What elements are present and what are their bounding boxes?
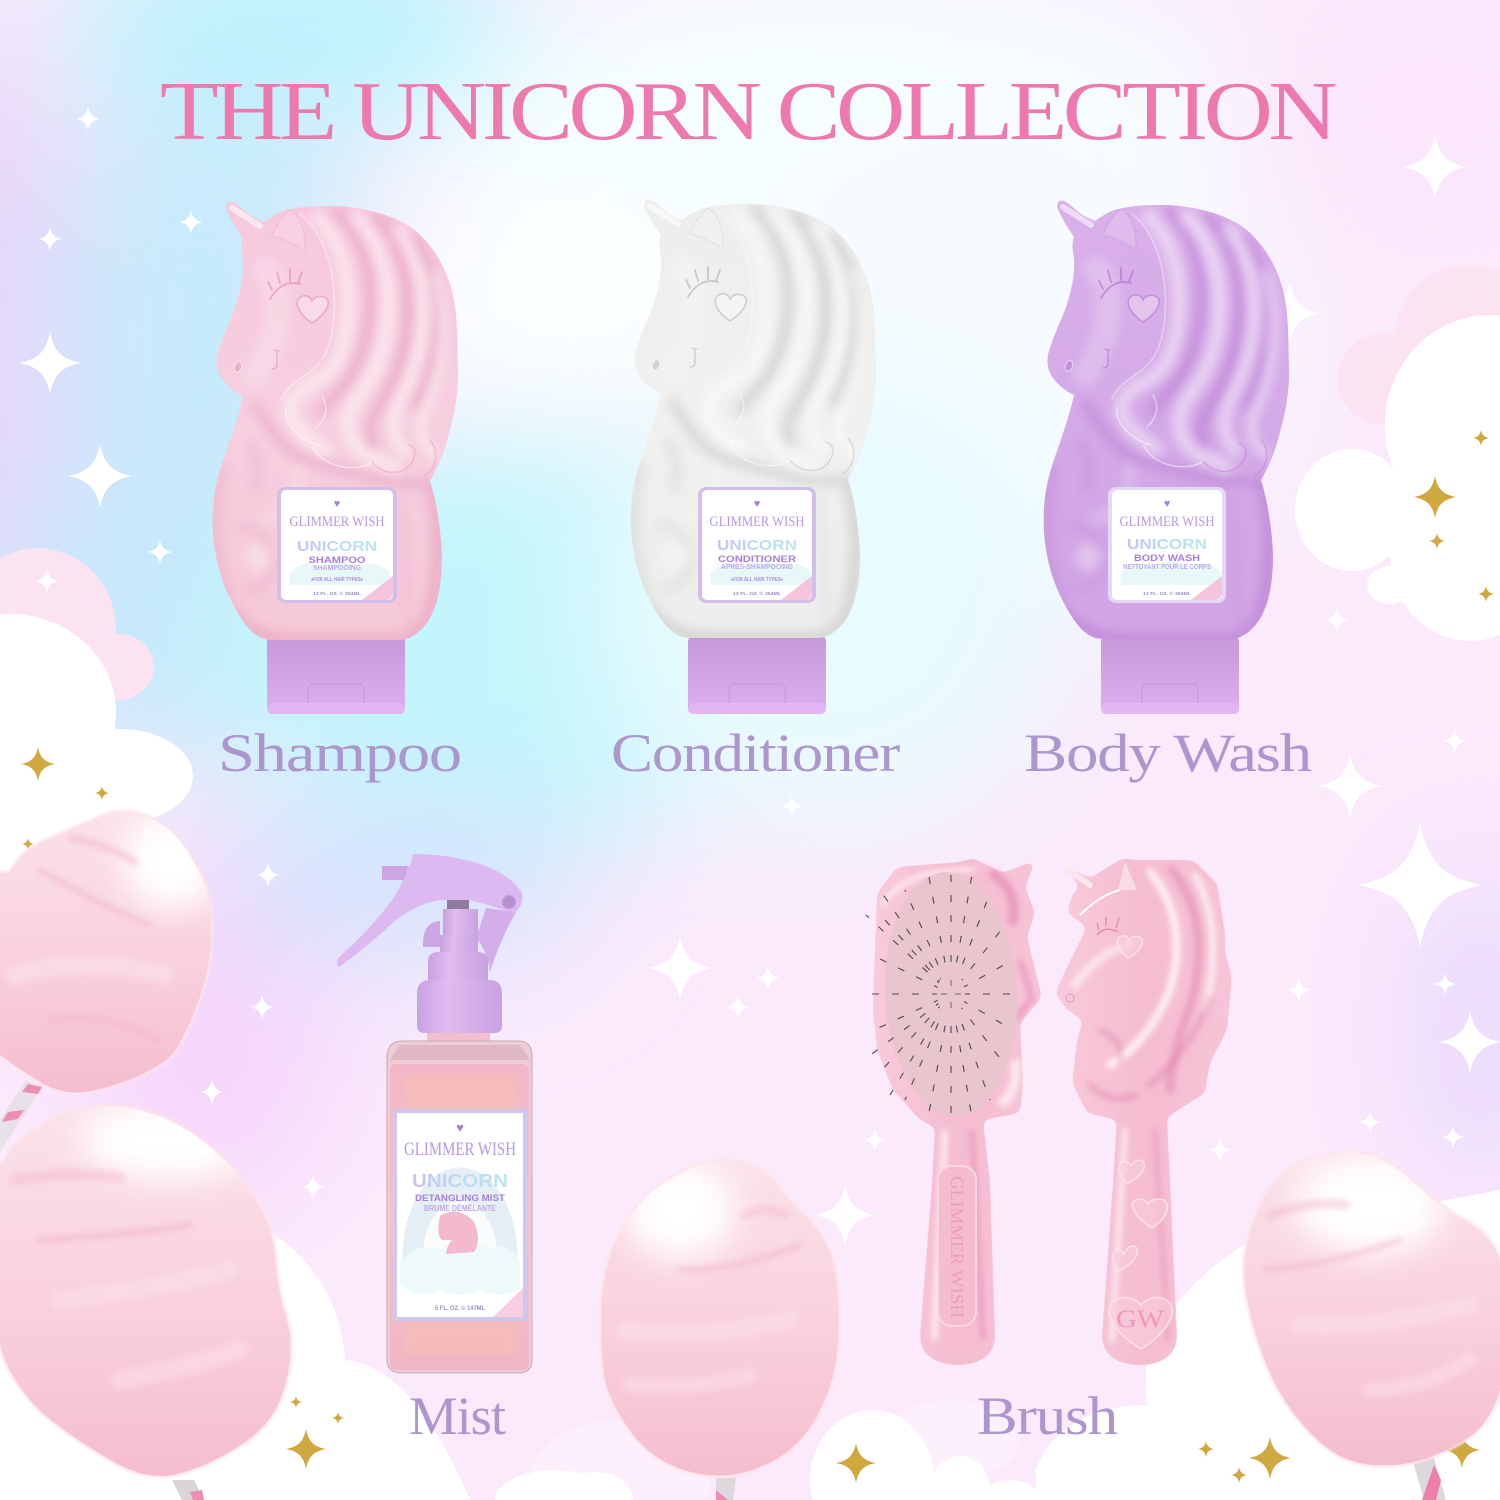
label: ♦FOR ALL HAIR TYPES♦ bbox=[731, 577, 783, 583]
unicorn body bbox=[631, 200, 876, 638]
mist label: 5 FL. OZ. © 147ML bbox=[435, 1305, 485, 1312]
brush: unicorn side bbox=[1055, 858, 1232, 1365]
label: ♥ bbox=[1164, 498, 1170, 510]
bottle: conditioner bbox=[631, 200, 876, 714]
mist label: GLIMMER WISH bbox=[404, 1139, 516, 1160]
gold sparkles bbox=[21, 430, 1494, 1483]
mist label bbox=[393, 1109, 527, 1321]
unicorn body bbox=[1044, 201, 1289, 639]
label bbox=[1108, 487, 1226, 603]
label: CONDITIONER bbox=[718, 554, 796, 565]
pump collar bbox=[417, 909, 502, 1033]
cap bbox=[1101, 634, 1239, 714]
product name: brush: Brush bbox=[977, 1386, 1118, 1446]
label bbox=[698, 487, 816, 603]
label: 12 FL. OZ. © 354ML bbox=[733, 590, 781, 597]
label: ♥ bbox=[754, 498, 760, 510]
product name: shampoo: Shampoo bbox=[218, 723, 461, 783]
mist label: UNICORN bbox=[412, 1171, 508, 1191]
brush: bristle side bbox=[860, 858, 1042, 1365]
product name: mist: Mist bbox=[409, 1386, 506, 1446]
label: ♥ bbox=[334, 498, 340, 510]
bottle: body wash bbox=[1044, 201, 1289, 714]
label: GLIMMER WISH bbox=[710, 514, 805, 530]
label: UNICORN bbox=[297, 538, 377, 555]
bottle: shampoo bbox=[213, 202, 458, 714]
label: SHAMPOOING bbox=[313, 565, 362, 572]
label: NETTOYANT POUR LE CORPS bbox=[1123, 564, 1211, 571]
clouds left bbox=[0, 548, 193, 910]
cap bbox=[688, 634, 826, 714]
handle plate with logo bbox=[938, 1166, 976, 1326]
label bbox=[277, 487, 397, 603]
unicorn body bbox=[213, 202, 458, 640]
mist label: BRUME DÉMÊLANTE bbox=[424, 1204, 497, 1213]
label: 12 FL. OZ. © 354ML bbox=[1143, 590, 1191, 597]
label: ♦FOR ALL HAIR TYPES♦ bbox=[311, 577, 363, 583]
product name: body wash: Body Wash bbox=[1024, 723, 1312, 783]
label: UNICORN bbox=[1127, 536, 1207, 553]
GW monogram: GW bbox=[1116, 1306, 1164, 1333]
cotton candy bottom right bbox=[1235, 1150, 1500, 1470]
label: APRÈS-SHAMPOOING bbox=[721, 562, 794, 571]
label: SHAMPOO bbox=[308, 555, 366, 566]
mist label: ♥ bbox=[456, 1120, 464, 1135]
bristle pad bbox=[860, 868, 1023, 1122]
trigger sprayer bbox=[337, 854, 522, 972]
cap bbox=[267, 634, 405, 714]
product name: conditioner: Conditioner bbox=[611, 723, 900, 783]
mist label: DETANGLING MIST bbox=[415, 1193, 506, 1203]
cotton candy bottom left bbox=[0, 1095, 305, 1490]
embossed hearts bbox=[1109, 936, 1172, 1349]
label: GLIMMER WISH bbox=[1120, 514, 1215, 530]
bottle glass bbox=[387, 1033, 532, 1373]
label: GLIMMER WISH bbox=[290, 514, 385, 530]
cotton candy bottom center bbox=[595, 1150, 845, 1485]
label: UNICORN bbox=[717, 537, 797, 554]
title: THE UNICORN COLLECTION bbox=[160, 65, 1336, 158]
handle plate with logo: GLIMMER WISH bbox=[947, 1176, 967, 1318]
cotton candy top left bbox=[0, 800, 225, 1100]
clouds bottom bbox=[0, 1190, 1500, 1500]
spray bottle: mist bbox=[337, 854, 532, 1373]
cotton candy sticks bbox=[0, 1080, 1446, 1500]
white sparkles bbox=[19, 107, 1500, 1245]
label: 12 FL. OZ. © 354ML bbox=[313, 590, 361, 597]
clouds right bbox=[1295, 265, 1500, 641]
label: BODY WASH bbox=[1134, 553, 1200, 564]
